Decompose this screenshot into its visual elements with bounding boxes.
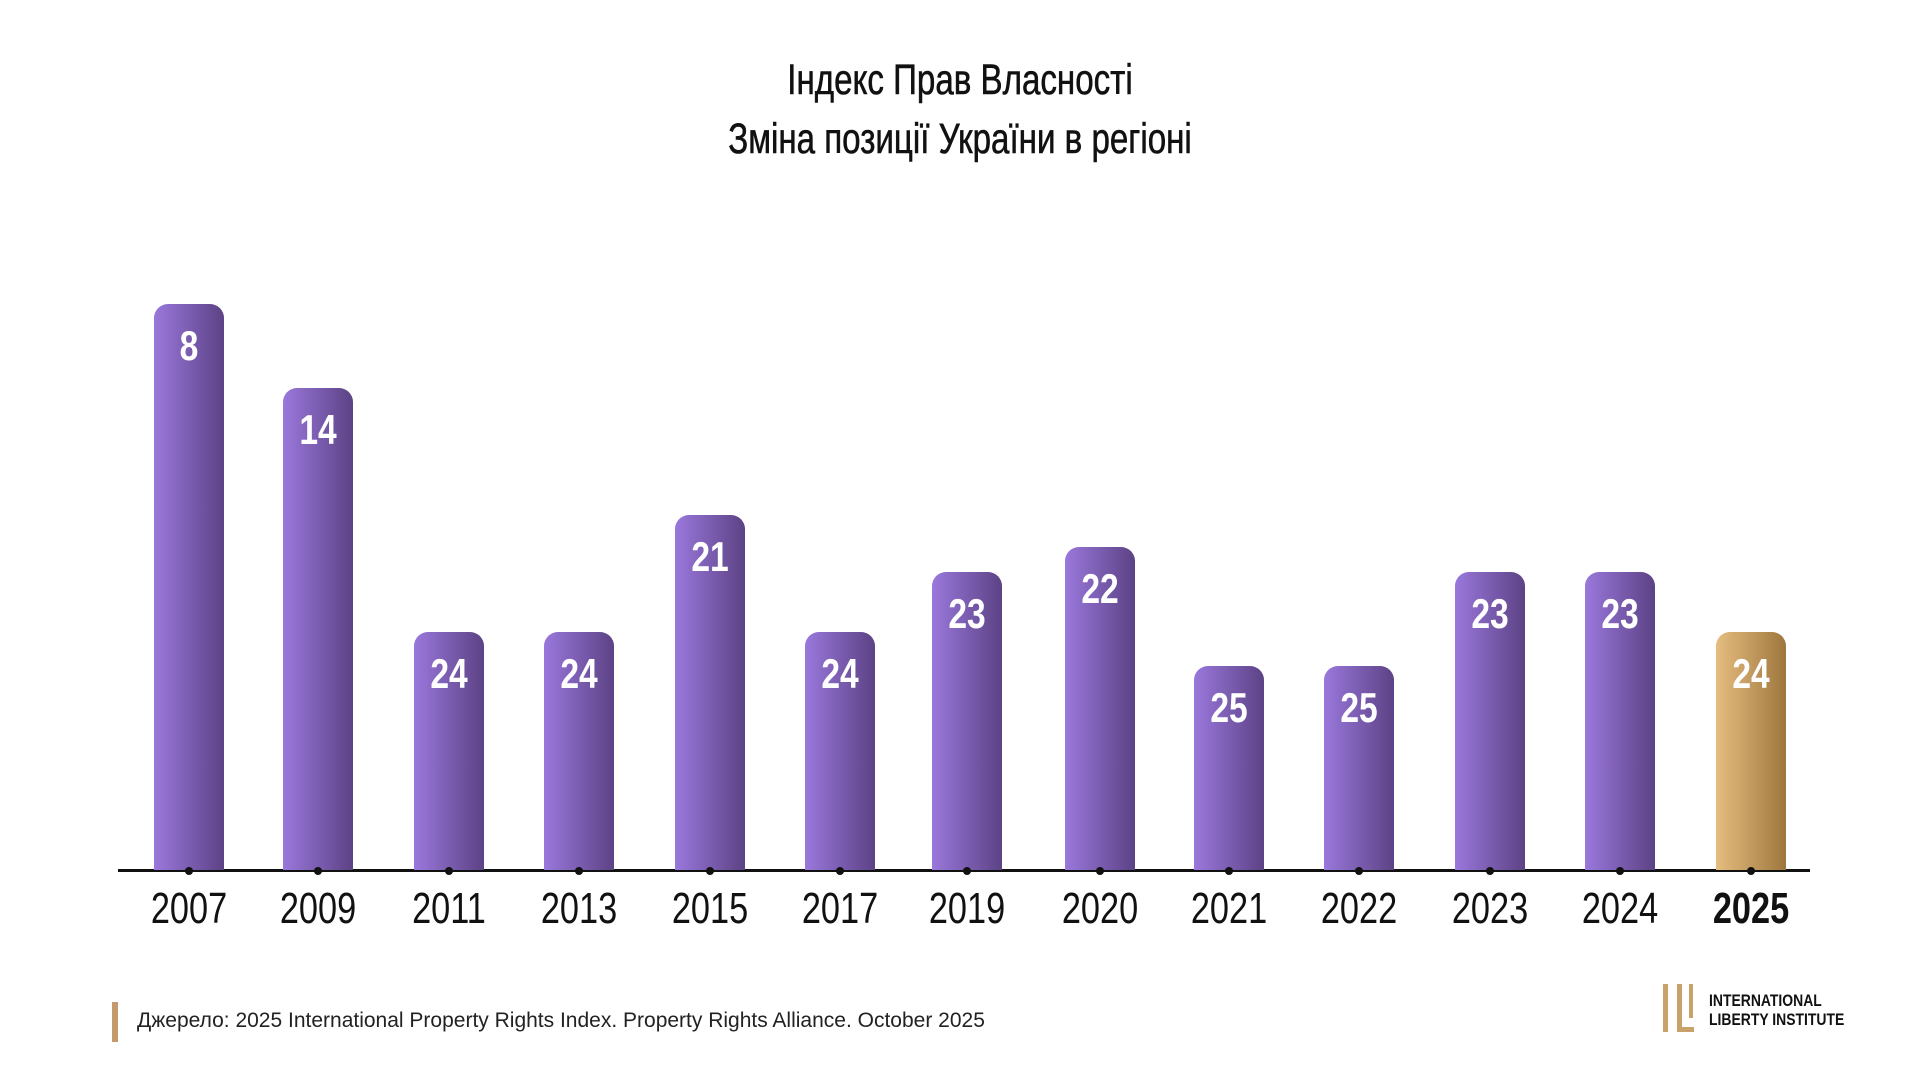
bar chart: 2009 [280,884,356,933]
bar chart: 2020 [1062,884,1138,933]
logo: LIBERTY INSTITUTE [1709,1010,1844,1029]
bar chart: 2025 [1713,884,1789,933]
bar chart: 8 [180,322,198,369]
bar chart: 2024 [1582,884,1658,933]
bar chart: 2023 [1452,884,1528,933]
subtitle: Зміна позиції України в регіоні [728,115,1192,163]
bar chart: 24 [430,650,468,697]
bar chart: 23 [948,590,986,637]
source note: Джерело: 2025 International Property Rights Index. Property Rights Alliance. October 2025 [137,1009,985,1032]
bar chart: 24 [560,650,598,697]
bar chart: 2017 [802,884,878,933]
bar chart: 22 [1081,565,1119,612]
bar chart: 23 [1601,590,1639,637]
bar chart: 2011 [412,884,486,933]
bar chart: 2022 [1321,884,1397,933]
bar chart: 2013 [541,884,617,933]
source note [112,1002,985,1042]
axis line [118,869,1810,872]
bar chart: 2021 [1191,884,1267,933]
bar chart: 24 [1732,650,1770,697]
bar chart: 25 [1210,684,1248,731]
title: Індекс Прав Власності [787,56,1133,104]
logo: INTERNATIONAL [1709,991,1822,1010]
bar chart: 25 [1340,684,1378,731]
bar chart: 2007 [151,884,227,933]
bar chart: 2015 [672,884,748,933]
bar chart: 24 [821,650,859,697]
bar chart: 2019 [929,884,1005,933]
logo [1663,984,1844,1032]
bar chart: 14 [299,406,337,453]
bar chart: 21 [691,533,729,580]
bar chart: 23 [1471,590,1509,637]
